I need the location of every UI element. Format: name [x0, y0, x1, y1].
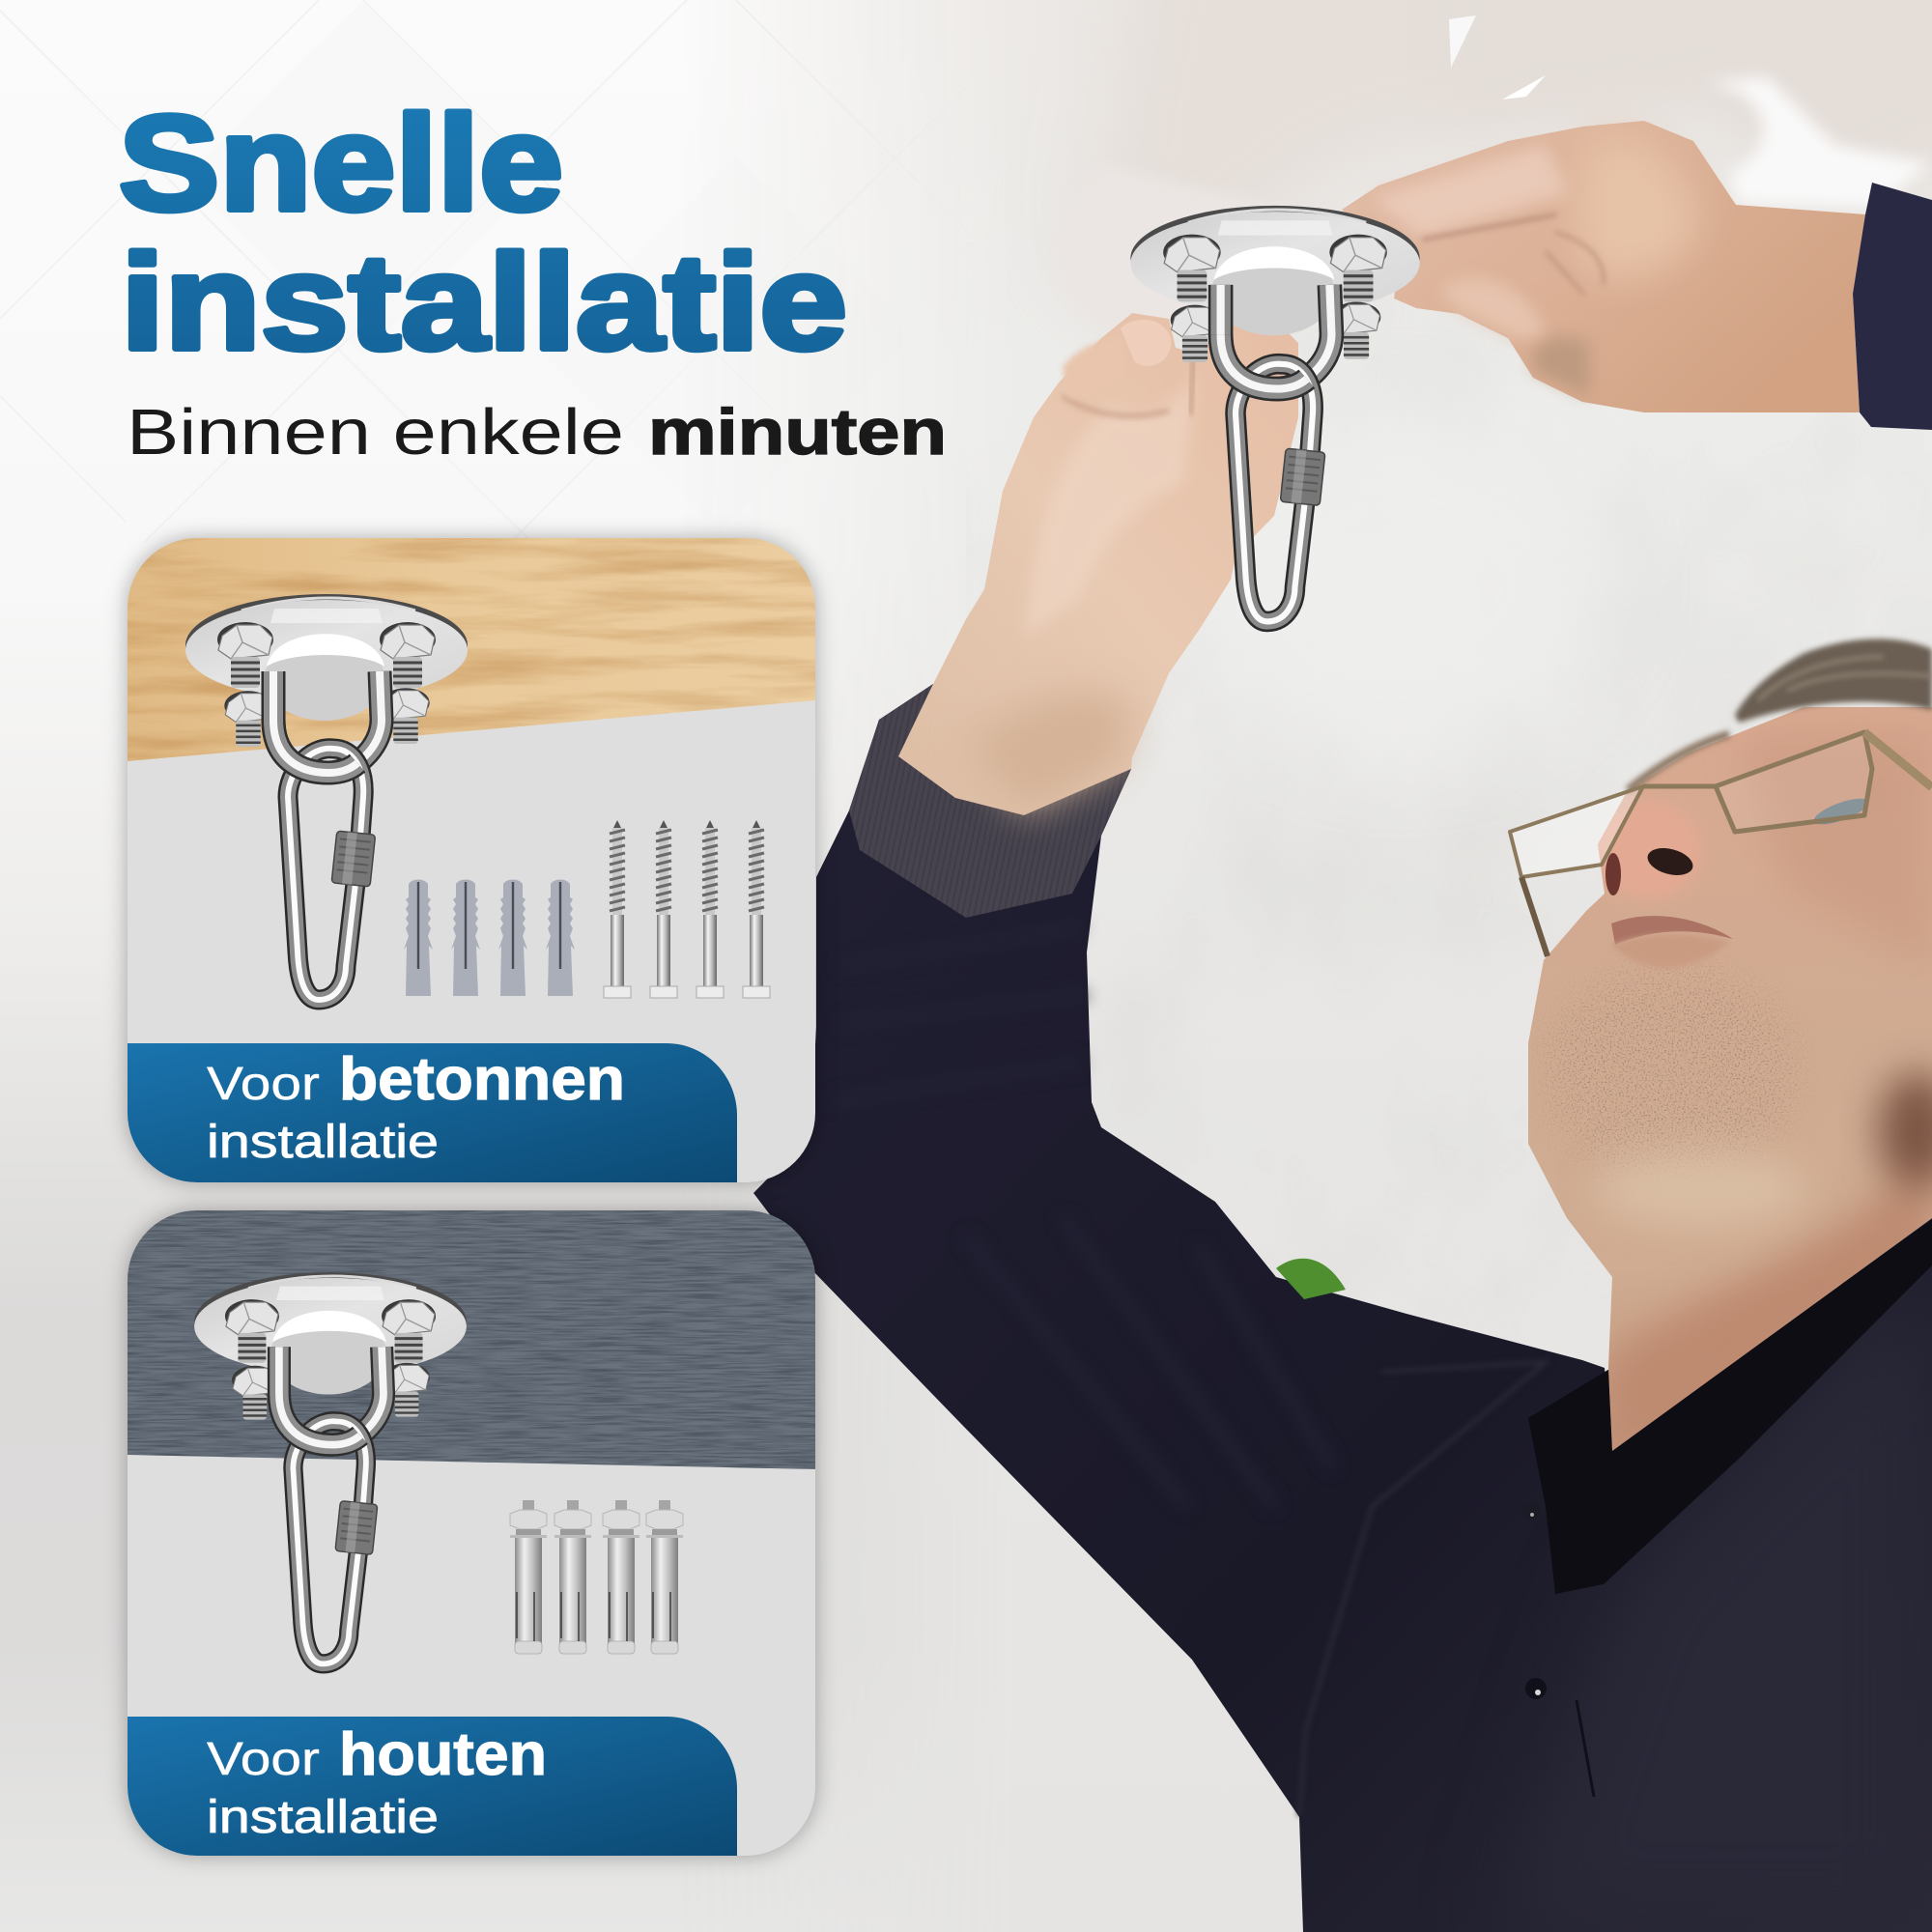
- ceiling hook product: [185, 594, 468, 1000]
- eyebrow: [1628, 734, 1729, 790]
- panel: wood installation card: [128, 1210, 815, 1856]
- face and neck: [1528, 707, 1932, 1451]
- glasses: [1510, 732, 1932, 956]
- subtitle: [127, 396, 947, 469]
- concrete surface: [128, 1210, 815, 1469]
- ceiling hook product: [194, 1272, 467, 1663]
- shirt buttons: [1523, 1501, 1547, 1699]
- left hand and forearm: [898, 313, 1298, 815]
- banner: [128, 1043, 737, 1182]
- banner: [128, 1717, 737, 1856]
- diamond pattern: [0, 0, 1063, 552]
- wood surface: [128, 538, 815, 762]
- banner text: Voor: [207, 1059, 320, 1110]
- panel: concrete installation card: [128, 538, 815, 1182]
- banner text: Voor: [207, 1734, 320, 1785]
- banner text: [207, 1721, 547, 1843]
- expansion anchors: [510, 1500, 683, 1654]
- photo wall: [804, 0, 1932, 1713]
- subtitle: minuten: [648, 396, 947, 469]
- banner text: installatie: [207, 1117, 439, 1168]
- ceiling folds: [1048, 0, 1932, 348]
- main product hook: [1130, 206, 1420, 621]
- subtitle: Binnen enkele: [127, 396, 624, 469]
- hair: [1735, 639, 1932, 723]
- shirt: body and raised arm: [753, 684, 1932, 1932]
- title: [119, 87, 847, 378]
- title: installatie: [121, 226, 847, 378]
- screws: [604, 820, 770, 998]
- green tool glimpse: [1276, 1259, 1346, 1299]
- banner text: betonnen: [339, 1046, 625, 1113]
- banner text: houten: [339, 1721, 547, 1788]
- right hand and forearm: [1342, 121, 1865, 412]
- banner text: installatie: [207, 1792, 439, 1843]
- wall plugs: [404, 879, 575, 996]
- title: Snelle: [119, 87, 563, 239]
- collar: [1528, 1219, 1932, 1594]
- cuff: [849, 684, 1131, 918]
- right sleeve: [1853, 183, 1932, 430]
- banner text: [207, 1046, 625, 1168]
- photo: man installing ceiling hook: [753, 121, 1932, 1932]
